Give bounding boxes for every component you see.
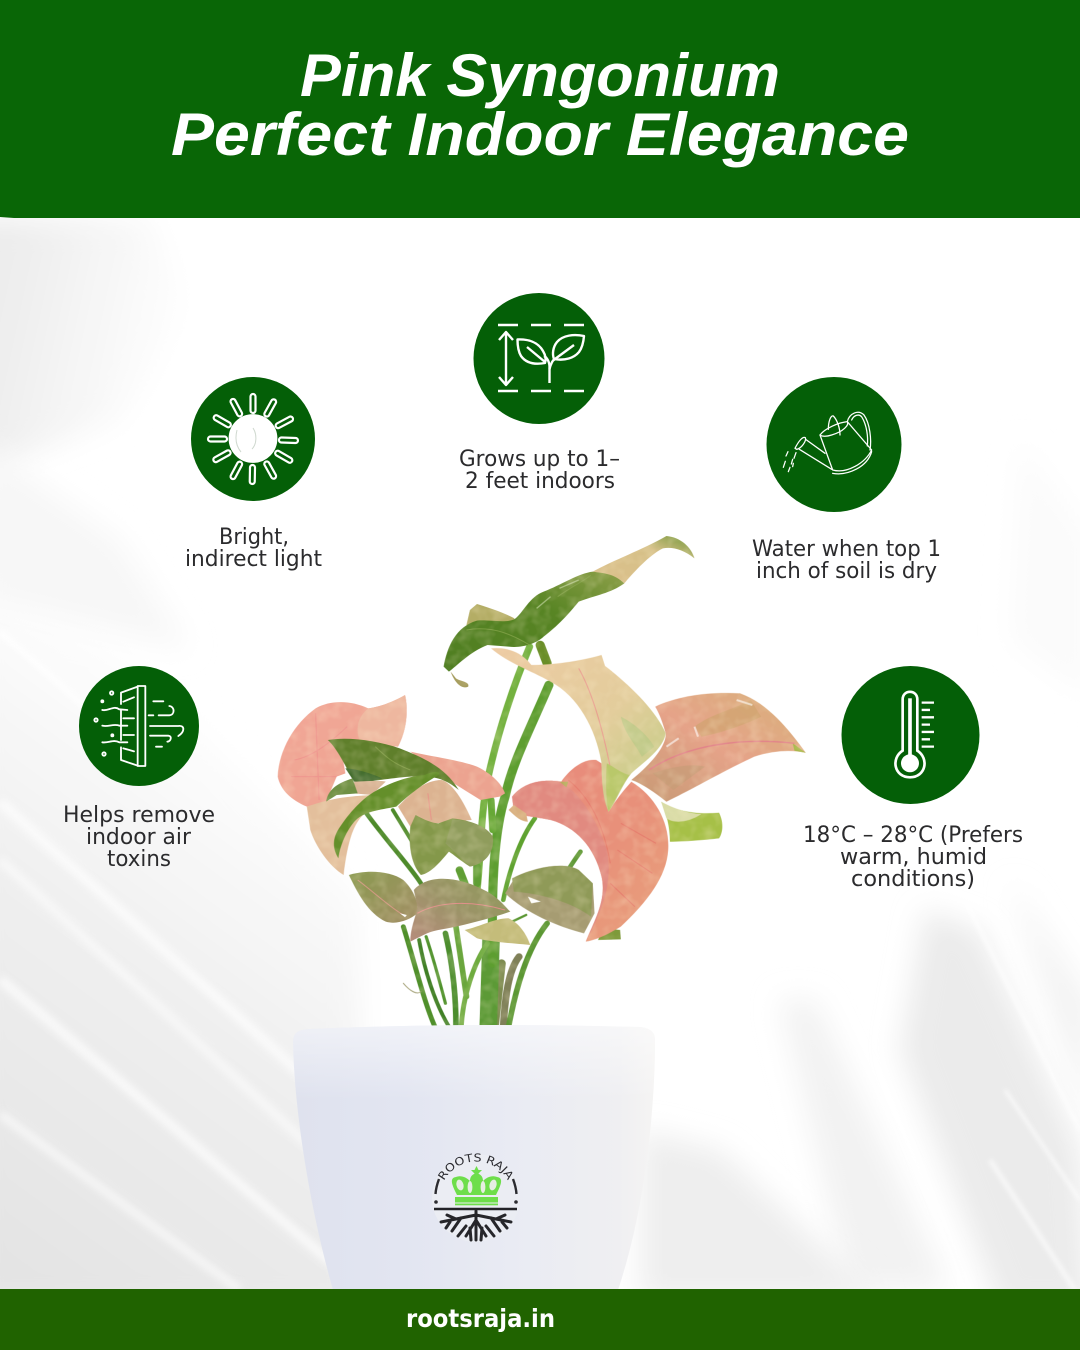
pot rim highlight	[293, 1025, 655, 1100]
footer website: rootsraja.in	[406, 1304, 555, 1333]
leaf: big salmon	[509, 760, 668, 942]
leaf: right olive	[505, 866, 621, 940]
care item: air purifying	[63, 666, 215, 872]
label: light: indirect light	[185, 546, 322, 572]
label: air purifying	[63, 802, 215, 872]
title: Perfect Indoor Elegance	[171, 101, 909, 168]
care item: light	[185, 377, 322, 572]
header band	[0, 0, 1080, 218]
label: watering: inch of soil is dry	[756, 558, 937, 584]
leaf: lower-left pale and green	[307, 772, 439, 875]
label: light	[185, 524, 322, 572]
label: watering	[752, 536, 941, 584]
pot	[294, 1025, 655, 1289]
label: air purifying: Helps remove	[63, 802, 215, 828]
footer band	[0, 1289, 1080, 1350]
label: air purifying: toxins	[107, 846, 171, 872]
label: growth	[459, 446, 620, 494]
label: temperature: warm, humid	[840, 844, 987, 870]
plant	[278, 536, 806, 1027]
leaf: tan	[398, 780, 472, 827]
leaf: heart green	[410, 815, 493, 875]
care item: growth	[459, 293, 620, 494]
leaf: lower olive	[349, 872, 418, 923]
label: growth: 2 feet indoors	[465, 468, 615, 494]
title	[171, 42, 909, 168]
icon: air filter	[79, 666, 199, 786]
logo: Roots Raja: ROOTS RAJA	[438, 1153, 512, 1180]
label: temperature: 18°C – 28°C (Prefers	[803, 822, 1023, 848]
stems	[366, 645, 580, 1027]
label: air purifying: indoor air	[86, 824, 192, 850]
label: temperature: conditions)	[851, 866, 975, 892]
label: watering: Water when top 1	[752, 536, 941, 562]
leaf: pink middle	[410, 752, 505, 800]
leaf: pale centre	[491, 648, 666, 812]
label: growth: Grows up to 1–	[459, 446, 620, 472]
pot body	[293, 1025, 655, 1290]
leaf: pink left	[278, 695, 407, 807]
leaf: small pale	[465, 918, 530, 945]
label: temperature	[803, 822, 1023, 892]
icon: sun	[191, 377, 315, 501]
leaf: back green	[661, 802, 722, 842]
logo: Roots Raja	[434, 1153, 518, 1242]
leaf: top	[444, 536, 694, 687]
title: Pink Syngonium	[300, 42, 780, 109]
leaf: lower olive pink	[410, 879, 510, 942]
leaf: right pink	[631, 693, 806, 802]
care item: temperature	[803, 666, 1023, 892]
leaf: dark green	[328, 739, 459, 790]
care item: watering	[752, 377, 941, 584]
label: light: Bright,	[219, 524, 289, 550]
icon: watering can	[766, 377, 902, 512]
icon: thermometer	[842, 666, 980, 804]
icon: plant height	[474, 293, 604, 424]
